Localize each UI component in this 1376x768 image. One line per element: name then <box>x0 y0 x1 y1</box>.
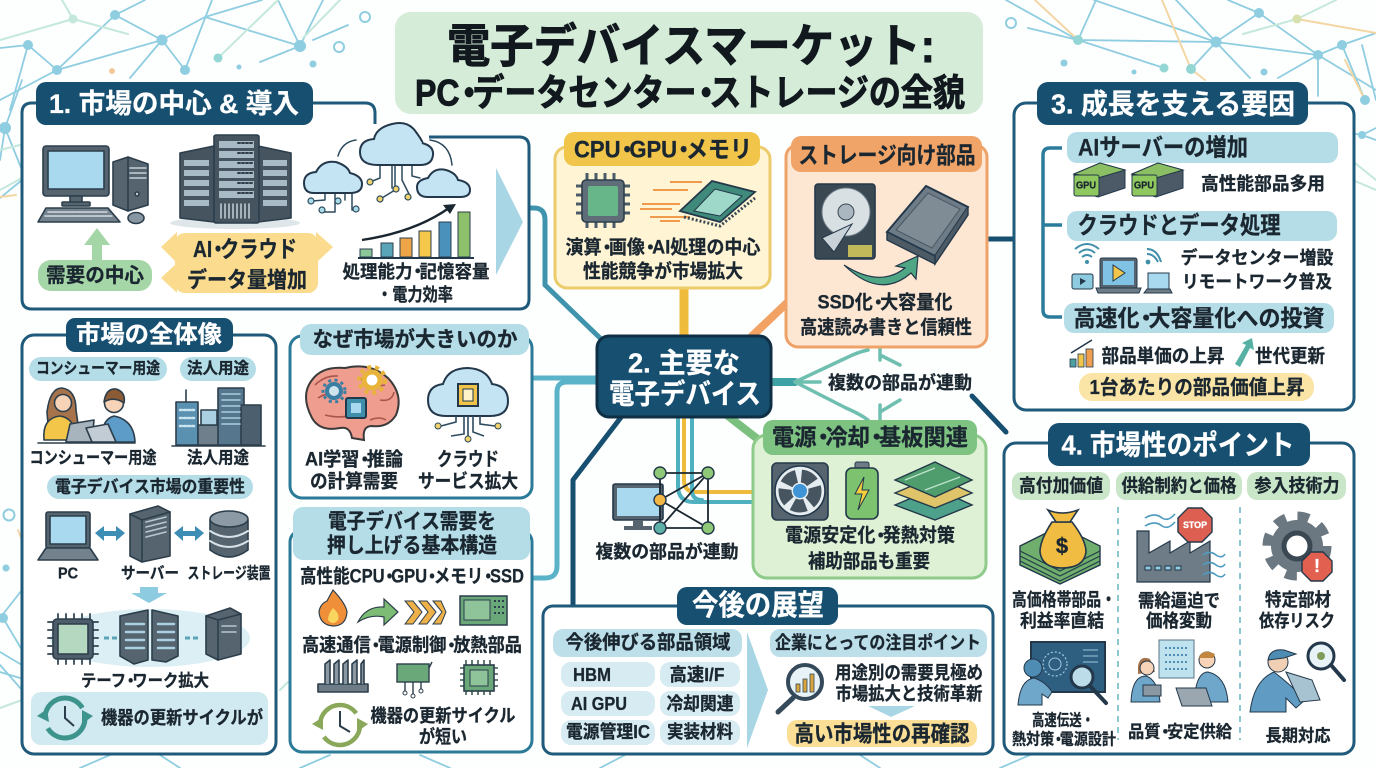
text: short cycle <box>370 706 516 747</box>
panel: 3 growth factors <box>1014 82 1354 410</box>
text: high performance: 高性能CPU・GPU・メモリ・SSD <box>300 566 524 588</box>
text: short cycle: 機器の更新サイクル <box>370 706 516 726</box>
text: short cycle: が短い <box>419 726 467 747</box>
text: storage description: 高速読み書きと信頼性 <box>800 316 972 338</box>
icon: gpu chip with speed lines <box>640 181 755 226</box>
heading: power cooling board <box>763 420 977 455</box>
arrow: down <box>131 587 167 603</box>
text: column 2 row 2: 品質・安定供給 <box>1128 722 1232 742</box>
text: power description <box>785 524 955 572</box>
text: comms: 高速通信・電源制御・放熱部品 <box>302 634 522 656</box>
icon: gear with warning <box>1267 516 1332 581</box>
heading: why: なぜ市場が大きいのか <box>312 328 518 352</box>
arrow: double blue 2 <box>174 526 204 541</box>
grid: component areas: 電源管理IC <box>566 721 650 742</box>
icon: money bag <box>1020 510 1100 584</box>
text: column 2 row 1: 需給逼迫で <box>1138 591 1220 611</box>
callout: reconfirm market: 高い市場性の再確認 <box>794 722 970 746</box>
icon: laptop <box>38 512 98 560</box>
center node: main electronic devices: 2. 主要な <box>628 348 740 378</box>
text: power description: 補助部品も重要 <box>808 550 930 572</box>
icon: office buildings <box>172 388 265 446</box>
icon: stacked circuit boards <box>895 462 972 520</box>
arrow: down to conclusion <box>868 706 915 717</box>
icon: chevrons <box>405 601 446 624</box>
tag: cloud data: クラウドとデータ処理 <box>1078 212 1280 240</box>
text: data work expansion: テーフ・ワーク拡大 <box>81 672 209 690</box>
heading: section 1: 1. 市場の中心 & 導入 <box>49 89 299 119</box>
icon: heatsink <box>318 660 368 692</box>
text: high performance parts: 高性能部品多用 <box>1201 173 1325 194</box>
text: column 1 row 1 <box>1012 590 1116 631</box>
text: price rise: 部品単価の上昇 <box>1102 346 1224 366</box>
heading: basic structure <box>293 507 530 560</box>
icon: server racks <box>170 135 300 229</box>
icons: media and remote devices <box>1072 244 1172 293</box>
heading: why <box>300 324 529 355</box>
text: column 1 row 1: 利益率直結 <box>1020 611 1104 631</box>
icon: gear with warning: ! <box>1314 556 1320 576</box>
label: demand center: 需要の中心 <box>46 264 144 287</box>
tag: focus points <box>770 629 987 657</box>
label: demand center <box>38 260 152 291</box>
panel: storage parts <box>786 136 987 347</box>
text: column 1 row 2: 高速伝送・ <box>1032 710 1094 730</box>
icon: clock cycle <box>312 705 368 745</box>
title <box>395 12 983 114</box>
heading: market overview: 市場の全体像 <box>76 322 222 348</box>
text: processing capacity: ・電力効率 <box>377 285 453 305</box>
tag: growing areas <box>553 629 742 657</box>
tag: growing areas: 今後伸びる部品領域 <box>566 632 730 654</box>
panel: future outlook <box>543 587 993 754</box>
text: generation update: 世代更新 <box>1255 346 1325 366</box>
icon: factory with stop sign: STOP <box>1183 520 1207 530</box>
tag: ai servers <box>1067 132 1338 163</box>
arrow: up teal <box>1235 338 1254 367</box>
title: PC・データセンター・ストレージの全貌 <box>415 72 965 114</box>
icon: brain with gears <box>306 366 399 440</box>
grid: component areas: 高速I/F <box>670 665 725 685</box>
icon: magnifier chart <box>778 665 822 712</box>
text: column 2 row 1 <box>1138 591 1220 631</box>
text: cpu description: 演算・画像・AI処理の中心 <box>566 236 760 258</box>
icon: desktop pc <box>38 146 148 224</box>
heading: basic structure: 電子デバイス需要を <box>328 510 496 534</box>
callout: AI cloud data growth: AI・クラウド <box>193 236 297 262</box>
bracket connector <box>1043 148 1062 317</box>
tags: three columns: 参入技術力 <box>1254 475 1340 496</box>
text: focus description: 用途別の需要見極め <box>835 663 983 683</box>
heading: storage parts: ストレージ向け部品 <box>798 142 976 168</box>
icon: database <box>210 511 248 557</box>
heading: storage parts <box>791 136 982 172</box>
text: cloud services: サービス拡大 <box>418 470 518 492</box>
panel: power cooling board <box>753 420 986 578</box>
icon: flame <box>319 590 347 626</box>
grid: component areas: AI GPU <box>571 694 627 714</box>
icon: cooling fan <box>772 463 828 520</box>
panel: 4 market points <box>1004 423 1354 754</box>
icon: cloud with chip <box>428 368 508 442</box>
panel: why the market is large <box>290 324 532 498</box>
text: AI demand: の計算需要 <box>310 470 398 492</box>
tag: consumer: コンシューマー用途 <box>36 360 160 378</box>
text: cloud services <box>418 448 518 492</box>
connector lines between panels <box>523 208 1043 606</box>
heading: future outlook: 今後の展望 <box>692 589 824 622</box>
heading: section 1 <box>36 82 313 125</box>
tags: three columns: 高付加価値 <box>1019 476 1103 496</box>
icon: hard disk <box>815 184 875 259</box>
tag: focus points: 企業にとっての注目ポイント <box>775 632 981 653</box>
text: AI demand: AI学習・推論 <box>305 448 403 470</box>
icon: gpu modules: GPU <box>1134 180 1154 192</box>
labels: pc server storage: ストレージ装置 <box>188 564 270 582</box>
grid: component areas: HBM <box>573 665 611 685</box>
arrow: green <box>358 599 398 625</box>
text: column 3 row 2: 長期対応 <box>1266 726 1330 746</box>
heading: power cooling board: 電源・冷却・基板関連 <box>772 424 968 450</box>
heading: section 3 <box>1037 82 1308 125</box>
icon: factory with stop sign <box>1137 508 1225 582</box>
illustration: network of linked parts <box>613 467 714 534</box>
tag: investment: 高速化・大容量化への投資 <box>1074 305 1324 331</box>
heading: basic structure: 押し上げる基本構造 <box>327 534 497 558</box>
heading: section 4 <box>1048 423 1310 466</box>
label: linked parts right: 複数の部品が連動 <box>828 372 972 393</box>
arrow: up to demand <box>84 228 110 262</box>
label: linked parts lower: 複数の部品が連動 <box>596 541 738 562</box>
arrow: hdd to ssd <box>844 256 918 285</box>
icon: circuit <box>397 662 432 698</box>
icon: price chart <box>1070 340 1093 367</box>
callout: update cycle: 機器の更新サイクルが <box>101 707 263 728</box>
icon: money bag: $ <box>1056 534 1068 558</box>
text: focus description: 市場拡大と技術革新 <box>836 683 982 704</box>
labels: pc server storage: PC <box>58 566 78 582</box>
callout: value per unit: 1台あたりの部品価値上昇 <box>1090 376 1304 399</box>
arrow: double blue 1 <box>95 526 125 541</box>
text: data center remote work: リモートワーク普及 <box>1182 272 1332 292</box>
illustration: quality team <box>1131 640 1228 706</box>
text: data center remote work <box>1180 247 1334 292</box>
illustration: engineer at board <box>1018 642 1106 705</box>
text: storage description <box>800 292 972 338</box>
chart: rising bars <box>358 204 474 258</box>
tag: enterprise <box>180 357 256 381</box>
callout: update cycle <box>31 692 268 745</box>
icon: gpu modules <box>1074 163 1183 197</box>
text: processing capacity: 処理能力・記憶容量 <box>342 262 490 282</box>
text: column 3 row 1: 特定部材 <box>1265 590 1331 610</box>
icon: cpu chip <box>576 173 630 228</box>
panel: cpu gpu memory <box>555 132 770 288</box>
heading: cpu gpu memory: CPU・GPU・メモリ <box>574 136 752 164</box>
text: column 1 row 2 <box>1012 710 1116 748</box>
tags: three columns <box>1012 472 1346 500</box>
tags: three columns: 供給制約と価格 <box>1122 476 1236 496</box>
center node: main electronic devices: 電子デバイス <box>609 378 761 410</box>
tag: importance: 電子デバイス市場の重要性 <box>55 476 245 496</box>
text: storage description: SSD化・大容量化 <box>818 292 952 314</box>
icon: solid state drive <box>887 186 968 264</box>
labels: pc server storage <box>58 564 270 582</box>
tag: enterprise: 法人用途 <box>187 358 249 378</box>
text: column 3 row 1: 依存リスク <box>1259 611 1335 631</box>
text: cpu description: 性能競争が市場拡大 <box>583 260 743 282</box>
icon: server tower <box>130 506 170 562</box>
icon: battery <box>846 462 878 519</box>
arrow: panel 1 output <box>496 168 523 275</box>
panel: market overview <box>22 318 276 754</box>
text: focus description <box>835 663 983 704</box>
grid: component areas: 実装材料 <box>667 722 733 742</box>
tag: consumer <box>29 357 167 381</box>
arrow: outlook <box>747 632 768 748</box>
tag: ai servers: AIサーバーの増加 <box>1078 134 1248 162</box>
labels: pc server storage: サーバー <box>121 564 179 582</box>
text: AI demand <box>305 448 403 492</box>
illustration: worker with magnifier <box>1250 643 1344 712</box>
heading: section 3: 3. 成長を支える要因 <box>1051 88 1295 120</box>
text: consumer use: コンシューマー用途 <box>30 448 156 468</box>
heading: section 4: 4. 市場性のポイント <box>1062 430 1294 460</box>
callout: AI cloud data growth: データ量増加 <box>187 268 307 292</box>
illustration: data work hardware <box>48 608 250 667</box>
heading: market overview <box>66 318 233 352</box>
panel: basic structure <box>290 507 532 752</box>
text: processing capacity <box>342 262 490 305</box>
icon: people with laptops <box>38 388 135 443</box>
callout: AI cloud data growth <box>161 232 333 293</box>
panel: 1 market center and adoption <box>22 82 529 309</box>
text: column 2 row 1: 価格変動 <box>1146 611 1212 631</box>
icon: gpu modules: GPU <box>1076 180 1096 192</box>
text: column 1 row 1: 高価格帯部品・ <box>1012 590 1116 610</box>
title: 電子デバイスマーケット: <box>447 20 935 72</box>
text: cpu description <box>566 236 760 282</box>
text: column 3 row 1 <box>1259 590 1335 631</box>
icon: chip <box>460 660 498 695</box>
grid: component areas <box>561 662 740 745</box>
text: column 1 row 2: 熱対策・電源設計 <box>1012 730 1116 748</box>
grid: component areas: 冷却関連 <box>666 694 734 714</box>
text: power description: 電源安定化・発熱対策 <box>785 524 955 546</box>
text: cloud services: クラウド <box>437 448 499 470</box>
dividers <box>1118 507 1240 740</box>
text: enterprise use: 法人用途 <box>187 448 249 468</box>
center node: main electronic devices <box>597 336 771 417</box>
text: data center remote work: データセンター増設 <box>1180 247 1334 268</box>
icon: memory board <box>460 596 507 625</box>
icon: cloud network <box>304 123 470 213</box>
